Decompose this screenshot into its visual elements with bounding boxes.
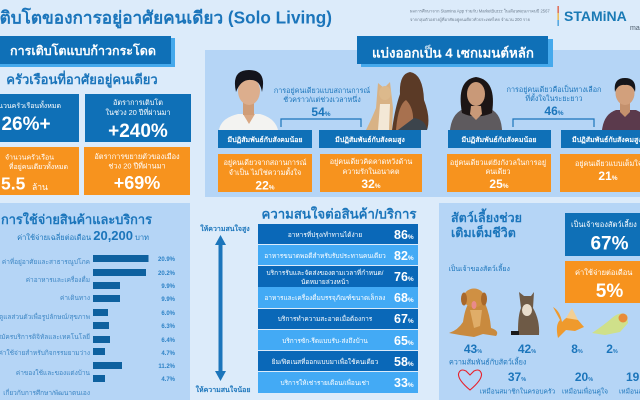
table: interest ranking xyxy=(258,224,418,393)
stat: growth rate: อัตราการเติบโต xyxy=(113,98,163,107)
icon: goldfish xyxy=(553,307,584,338)
segment 2: มีปฏิสัมพันธ์กับสังคมสูง xyxy=(335,135,405,145)
pets heading: เติมเต็มชีวิต xyxy=(451,225,516,240)
bar chart: spending: 9.9% xyxy=(161,297,176,303)
bar chart: spending: 11.2% xyxy=(158,364,176,370)
segment 3: มีปฏิสัมพันธ์กับสังคมน้อย xyxy=(461,135,537,144)
callout: 46 percent chosen: 46% xyxy=(544,104,564,118)
bar chart: spending: 6.4% xyxy=(161,338,176,344)
stat: share of households xyxy=(0,94,79,142)
table: interest ranking: นัดหมายล่วงหน้า xyxy=(301,278,349,286)
segment 2 xyxy=(319,130,422,192)
stat: growth rate: ในช่วง 20 ปีที่ผ่านมา xyxy=(105,107,171,117)
stat: growth rate xyxy=(85,94,191,142)
bar chart: spending: เกี่ยวกับการศึกษา/พัฒนาตนเอง xyxy=(3,388,90,397)
panel: segments xyxy=(205,50,640,197)
pet percentages xyxy=(464,342,618,356)
bracket: 54 percent xyxy=(281,119,361,127)
stat: monthly spending: 5% xyxy=(596,281,623,302)
bar chart: spending: 4.7% xyxy=(161,351,176,357)
logo: Stamina xyxy=(558,6,640,32)
pet percentages: 42% xyxy=(518,342,536,356)
panel: spending xyxy=(0,203,190,400)
callout: 46 percent chosen xyxy=(507,84,601,118)
bar chart: spending: 20.2% xyxy=(158,271,176,277)
pets heading xyxy=(451,208,522,240)
pets heading: สัตว์เลี้ยงช่วย xyxy=(451,208,522,225)
relationship stats: เหมือนสมาชิกในครอบครัว xyxy=(480,388,556,396)
arrow: interest scale xyxy=(215,235,226,381)
stat: pet owners: 67% xyxy=(590,234,629,254)
segment 3: 25% xyxy=(489,177,509,191)
callout: 46 percent chosen: ที่ตั้งใจในระยะยาว xyxy=(525,93,583,103)
heading: solo households: ครัวเรือนที่อาศัยอยู่คนเดียว xyxy=(6,70,158,88)
stat: monthly spending xyxy=(565,261,640,303)
bar chart: spending: ค่าใช้จ่ายสำหรับกิจกรรมยามว่าง xyxy=(0,349,90,357)
label: pet ownership: เป็นเจ้าของสัตว์เลี้ยง xyxy=(448,262,510,273)
table: interest ranking: 86% xyxy=(394,228,414,242)
segment 2: 32% xyxy=(361,177,381,191)
bar chart: spending: 9.9% xyxy=(161,284,176,290)
relationship stats: เหมือนเพื่อนคู่ใจ xyxy=(562,386,608,396)
stat: number of households: 5.5 xyxy=(1,174,26,194)
segment 4: มีปฏิสัมพันธ์กับสังคมสูง xyxy=(572,135,640,145)
pet percentages: 2% xyxy=(606,342,618,356)
table: interest ranking: 33% xyxy=(394,376,414,390)
source note xyxy=(410,8,550,23)
relationship stats: 37% xyxy=(508,370,526,384)
bar chart: spending: 20.9% xyxy=(158,257,176,263)
bar chart: spending: 4.7% xyxy=(161,377,176,383)
icon: dog xyxy=(449,288,497,337)
bar chart: spending: ดูแลส่วนตัวเพื่อรูปลักษณ์/สุขภาพ xyxy=(0,312,90,321)
icon: parrot xyxy=(592,314,628,335)
photo: woman xyxy=(450,77,502,130)
spending heading: การใช้จ่ายสินค้าและบริการ xyxy=(1,211,152,227)
stat: number of households: ที่อยู่คนเดียวทั้งหมด xyxy=(9,160,68,171)
stat: urban expansion: +69% xyxy=(114,173,160,193)
table: interest ranking: 67% xyxy=(394,312,414,326)
segment 4 xyxy=(560,130,640,192)
logo: Stamina: STAMiNA xyxy=(564,8,627,24)
segments header: แบ่งออกเป็น 4 เซกเมนต์หลัก xyxy=(372,44,534,60)
segment 1: จำเป็น ไม่ใช่ความตั้งใจ xyxy=(229,167,301,177)
relationship stats: 20% xyxy=(575,370,593,384)
segment 1: อยู่คนเดียวจากสถานการณ์ xyxy=(224,158,307,167)
bar chart: spending: ค่าเดินทาง xyxy=(60,294,90,302)
table: interest ranking: บริการซัก-รีดแบบรับ-ส่งถึงบ้าน xyxy=(282,337,368,345)
panel: growth header: การเติบโตแบบก้าวกระโดด xyxy=(10,43,156,58)
segment 1: 22% xyxy=(255,178,275,192)
segment 4: 21% xyxy=(598,169,618,183)
stat: monthly spending: ค่าใช้จ่ายต่อเดือน xyxy=(575,268,632,277)
callout: 54 percent temporary: การอยู่คนเดียวแบบสถานการณ์ xyxy=(274,86,370,95)
segment 1 xyxy=(218,130,312,192)
panel: growth header xyxy=(0,36,175,67)
bar chart: spending: 6.0% xyxy=(161,311,176,317)
label: low interest: ให้ความสนใจน้อย xyxy=(196,385,250,394)
bar chart: spending: 6.3% xyxy=(161,324,176,330)
callout: 54 percent temporary: ชั่วคราว/แต่ช่วงเวลาหนึ่ง xyxy=(283,95,361,104)
relationship stats: 19 xyxy=(626,370,640,384)
label: relationship with pets: ความสัมพันธ์กับสัตว์เลี้ยง xyxy=(449,356,526,366)
bar chart: spending: ค่าของใช้และของแต่งบ้าน xyxy=(16,369,91,377)
segment 3: อยู่คนเดียวแต่ยังกังวลในการอยู่ xyxy=(450,158,546,167)
stat: growth rate: +240% xyxy=(108,121,168,142)
callout: 54 percent temporary: 54% xyxy=(311,105,331,119)
stat: pet owners xyxy=(565,213,640,256)
bar chart: spending: ค่าที่อยู่อาศัยและสาธารณูปโภค xyxy=(2,257,90,266)
table: interest ranking: บริการทำความสะอาดเมื่อต้องการ xyxy=(278,314,373,323)
pet percentages: 43% xyxy=(464,342,482,356)
table: interest ranking: 76% xyxy=(394,270,414,284)
stat: pet owners: เป็นเจ้าของสัตว์เลี้ยง xyxy=(571,219,637,229)
stat: urban expansion xyxy=(84,147,190,195)
icon: heart xyxy=(458,370,482,390)
bracket: 46 percent xyxy=(513,119,594,127)
callout: 54 percent temporary xyxy=(274,86,370,119)
table: interest ranking: บริการให้เช่ารายเดือน/เพื่อนเช่า xyxy=(280,378,370,387)
table: interest ranking: ยิม/ฟิตเนสที่ออกแบบมาเพื่อใช้คนเดียว xyxy=(272,357,379,366)
stat: urban expansion: ช่วง 20 ปีที่ผ่านมา xyxy=(108,160,166,170)
relationship stats xyxy=(480,370,640,396)
photo: woman with dog xyxy=(366,72,428,130)
spending subheading: ค่าใช้จ่ายเฉลี่ยต่อเดือน 20,200 บาท xyxy=(17,228,149,243)
segment 3: คนเดียว xyxy=(485,167,511,176)
stat: number of households: ล้าน xyxy=(32,182,48,192)
stat: urban expansion: อัตราการขยายตัวของเมือง xyxy=(94,152,180,161)
icon: cat xyxy=(511,292,539,335)
table: interest ranking: 65% xyxy=(394,334,414,348)
table: interest ranking: บริการรับและจัดส่งของตามเวลาที่กำหนด/ xyxy=(267,268,384,277)
source note: ผลการศึกษาจาก Stamina App ร่วมกับ MarketBuzzz ในเดือนพฤษภาคมปี 2567 xyxy=(410,8,550,14)
segment 2: ความรักในอนาคต xyxy=(342,167,400,176)
pet percentages: 8% xyxy=(571,342,583,356)
segment 1: มีปฏิสัมพันธ์กับสังคมน้อย xyxy=(227,135,303,144)
segment 3 xyxy=(447,130,551,192)
table: interest ranking: อาหารและเครื่องดื่มบรรจุภัณฑ์ขนาดเล็กลง xyxy=(265,293,385,302)
source note: จากกลุ่มตัวอย่างผู้ที่อาศัยอยู่คนเดียวทั่วประเทศไทย จำนวน 200 ราย xyxy=(410,16,530,23)
segment 2: อยู่คนเดียวคิดคาดหวังด้าน xyxy=(330,157,412,166)
stat: number of households xyxy=(0,147,79,195)
callout: 46 percent chosen: การอยู่คนเดียวคือเป็นทางเลือก xyxy=(507,84,601,94)
stat: share of households: 26%+ xyxy=(1,114,51,135)
photo: young man xyxy=(219,70,278,130)
table: interest ranking: อาหารขนาดพอดีสำหรับรับประทานคนเดียว xyxy=(264,252,386,260)
panel: pets xyxy=(439,203,640,400)
table: interest ranking: 68% xyxy=(394,291,414,305)
table: interest ranking: อาหารที่ปรุง/ทำทานได้ง่าย xyxy=(288,230,362,239)
bar chart: spending: ค่าอาหารและเครื่องดื่ม xyxy=(26,275,90,284)
stat: number of households: จำนวนครัวเรือน xyxy=(5,154,54,162)
logo: Stamina: ma xyxy=(630,25,640,32)
table: interest ranking: 82% xyxy=(394,249,414,263)
photo: man xyxy=(602,78,640,130)
label: high interest: ให้ความสนใจสูง xyxy=(200,224,250,234)
segments header xyxy=(357,36,553,67)
segment 4: อยู่คนเดียวแบบเต็มใจ xyxy=(575,158,640,168)
bar chart: spending xyxy=(0,255,176,397)
heading: interest: ความสนใจต่อสินค้า/บริการ xyxy=(262,206,417,222)
table: interest ranking: 58% xyxy=(394,355,414,369)
